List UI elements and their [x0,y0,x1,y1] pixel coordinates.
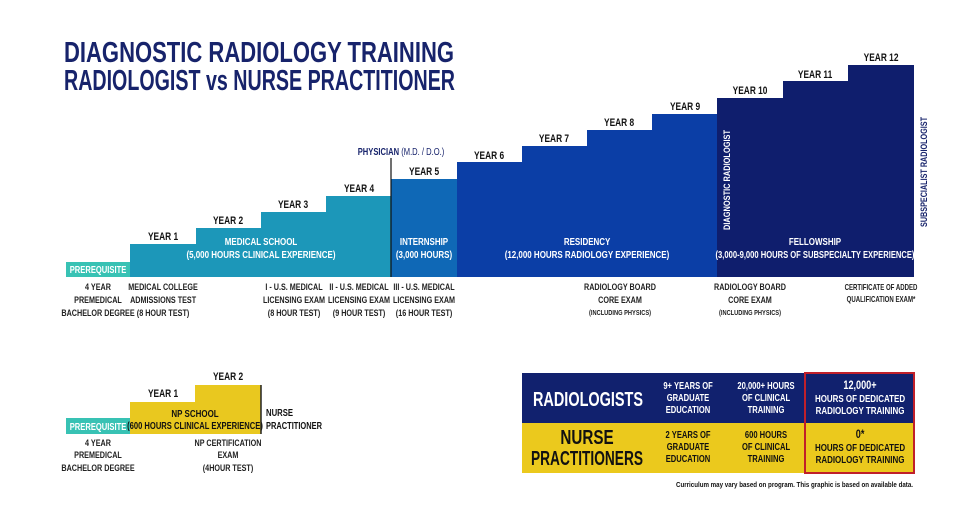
exam labels: (INCLUDING PHYSICS) [719,309,781,317]
NP year labels: YEAR 2 [213,371,244,383]
year labels: YEAR 9 [670,101,701,113]
radiologists row: 9+ YEARS OF [663,380,713,391]
physician marker [358,146,444,277]
year labels: YEAR 10 [733,85,768,97]
year labels: YEAR 3 [278,199,309,211]
nurse practitioners row: GRADUATE [667,441,709,452]
exam labels: (8 HOUR TEST) [137,307,189,318]
NP exam labels: (4HOUR TEST) [203,462,253,473]
title: RADIOLOGIST vs NURSE PRACTITIONER [64,65,455,97]
radiologists row: RADIOLOGY TRAINING [816,405,904,416]
radiologists row: EDUCATION [666,404,710,415]
chart: radiologist pathway [61,52,930,318]
exam labels: 4 YEAR [85,281,111,292]
subspecialist label: SUBSPECIALIST RADIOLOGIST [919,117,930,227]
year labels: YEAR 7 [539,133,569,145]
NP exam labels [61,437,261,473]
medical school block [130,196,391,277]
exam labels: RADIOLOGY BOARD [584,281,656,292]
year labels [148,52,899,243]
NP exam labels: PREMEDICAL [74,449,122,460]
highlight box [805,373,914,473]
fellowship block [716,65,914,277]
exam labels: QUALIFICATION EXAM* [847,295,916,304]
residency block [457,114,717,277]
nurse practitioners row: 2 YEARS OF [666,429,711,440]
chart: nurse practitioner pathway [61,371,322,473]
exam labels: LICENSING EXAM [393,294,455,305]
exam labels: CORE EXAM [598,294,642,305]
exam labels: RADIOLOGY BOARD [714,281,786,292]
NP prerequisite block [66,418,130,434]
nurse practitioners row: 600 HOURS [745,429,787,440]
title [64,37,455,97]
exam labels: LICENSING EXAM [263,294,325,305]
NP prerequisite block: PREREQUISITE [70,421,126,432]
nurse practitioners row: PRACTITIONERS [531,448,643,470]
physician marker: PHYSICIAN (M.D. / D.O.) [358,146,444,157]
nurse practitioners row: HOURS OF DEDICATED [815,442,905,453]
nurse practitioners row: EDUCATION [666,453,710,464]
radiologists row: RADIOLOGISTS [533,389,643,411]
title: DIAGNOSTIC RADIOLOGY TRAINING [64,37,454,69]
exam labels [61,281,917,318]
nurse practitioners row: 0* [856,428,865,441]
exam labels: ADMISSIONS TEST [130,294,197,305]
NP exam labels: EXAM [218,449,238,460]
comparison table [522,373,915,473]
nurse practitioners row: TRAINING [748,453,784,464]
year labels: YEAR 11 [798,69,833,81]
nurse practitioner label: NURSE [266,407,293,419]
NP exam labels: NP CERTIFICATION [195,437,261,448]
fellowship block: DIAGNOSTIC RADIOLOGIST [722,130,733,230]
exam labels: (9 HOUR TEST) [333,307,385,318]
nurse practitioner label [266,407,322,432]
radiologists row: HOURS OF DEDICATED [815,393,905,404]
prerequisite block: PREREQUISITE [70,264,126,275]
exam labels: CORE EXAM [728,294,772,305]
nurse practitioners row [531,426,905,470]
nurse practitioner label: PRACTITIONER [266,420,322,432]
exam labels: (8 HOUR TEST) [268,307,320,318]
year labels: YEAR 5 [409,166,440,178]
year labels: YEAR 2 [213,215,244,227]
residency block: RESIDENCY [564,236,611,247]
exam labels: MEDICAL COLLEGE [128,281,198,292]
radiologists row: TRAINING [748,404,784,415]
footnote: Curriculum may vary based on program. This graphic is based on available data. [676,480,913,489]
year labels: YEAR 8 [604,117,635,129]
internship block [391,179,457,277]
exam labels: CERTIFICATE OF ADDED [845,283,917,292]
internship block: INTERNSHIP [400,236,448,247]
exam labels: BACHELOR DEGREE [61,307,135,318]
radiologists row: 12,000+ [843,379,877,392]
exam labels: (INCLUDING PHYSICS) [589,309,651,317]
NP school block [127,385,263,434]
internship block: (3,000 HOURS) [396,249,452,260]
year labels: YEAR 1 [148,231,179,243]
NP school block: NP SCHOOL [171,408,219,419]
radiologists row: OF CLINICAL [742,392,791,403]
year labels: YEAR 6 [474,150,505,162]
year labels: YEAR 12 [864,52,899,64]
nurse practitioners row: OF CLINICAL [742,441,791,452]
fellowship block: (3,000-9,000 HOURS OF SUBSPECIALTY EXPERIENCE) [716,249,914,260]
radiologists row [533,379,905,416]
NP exam labels: 4 YEAR [85,437,111,448]
NP year labels [148,371,244,400]
fellowship block: FELLOWSHIP [789,236,841,247]
exam labels: (16 HOUR TEST) [396,307,452,318]
residency block: (12,000 HOURS RADIOLOGY EXPERIENCE) [505,249,669,260]
exam labels: III - U.S. MEDICAL [393,281,455,292]
nurse practitioners row: NURSE [560,426,614,449]
nurse practitioners row: RADIOLOGY TRAINING [816,454,904,465]
medical school block: (5,000 HOURS CLINICAL EXPERIENCE) [186,249,336,260]
radiologists row: 20,000+ HOURS [737,380,795,391]
NP school block: (600 HOURS CLINICAL EXPERIENCE) [127,420,263,431]
medical school block: MEDICAL SCHOOL [225,236,298,247]
NP year labels: YEAR 1 [148,388,179,400]
year labels: YEAR 4 [344,183,375,195]
NP exam labels: BACHELOR DEGREE [61,462,135,473]
exam labels: PREMEDICAL [74,294,122,305]
exam labels: II - U.S. MEDICAL [329,281,389,292]
radiologists row: GRADUATE [667,392,709,403]
prerequisite block [66,262,130,277]
exam labels: I - U.S. MEDICAL [265,281,323,292]
exam labels: LICENSING EXAM [328,294,390,305]
